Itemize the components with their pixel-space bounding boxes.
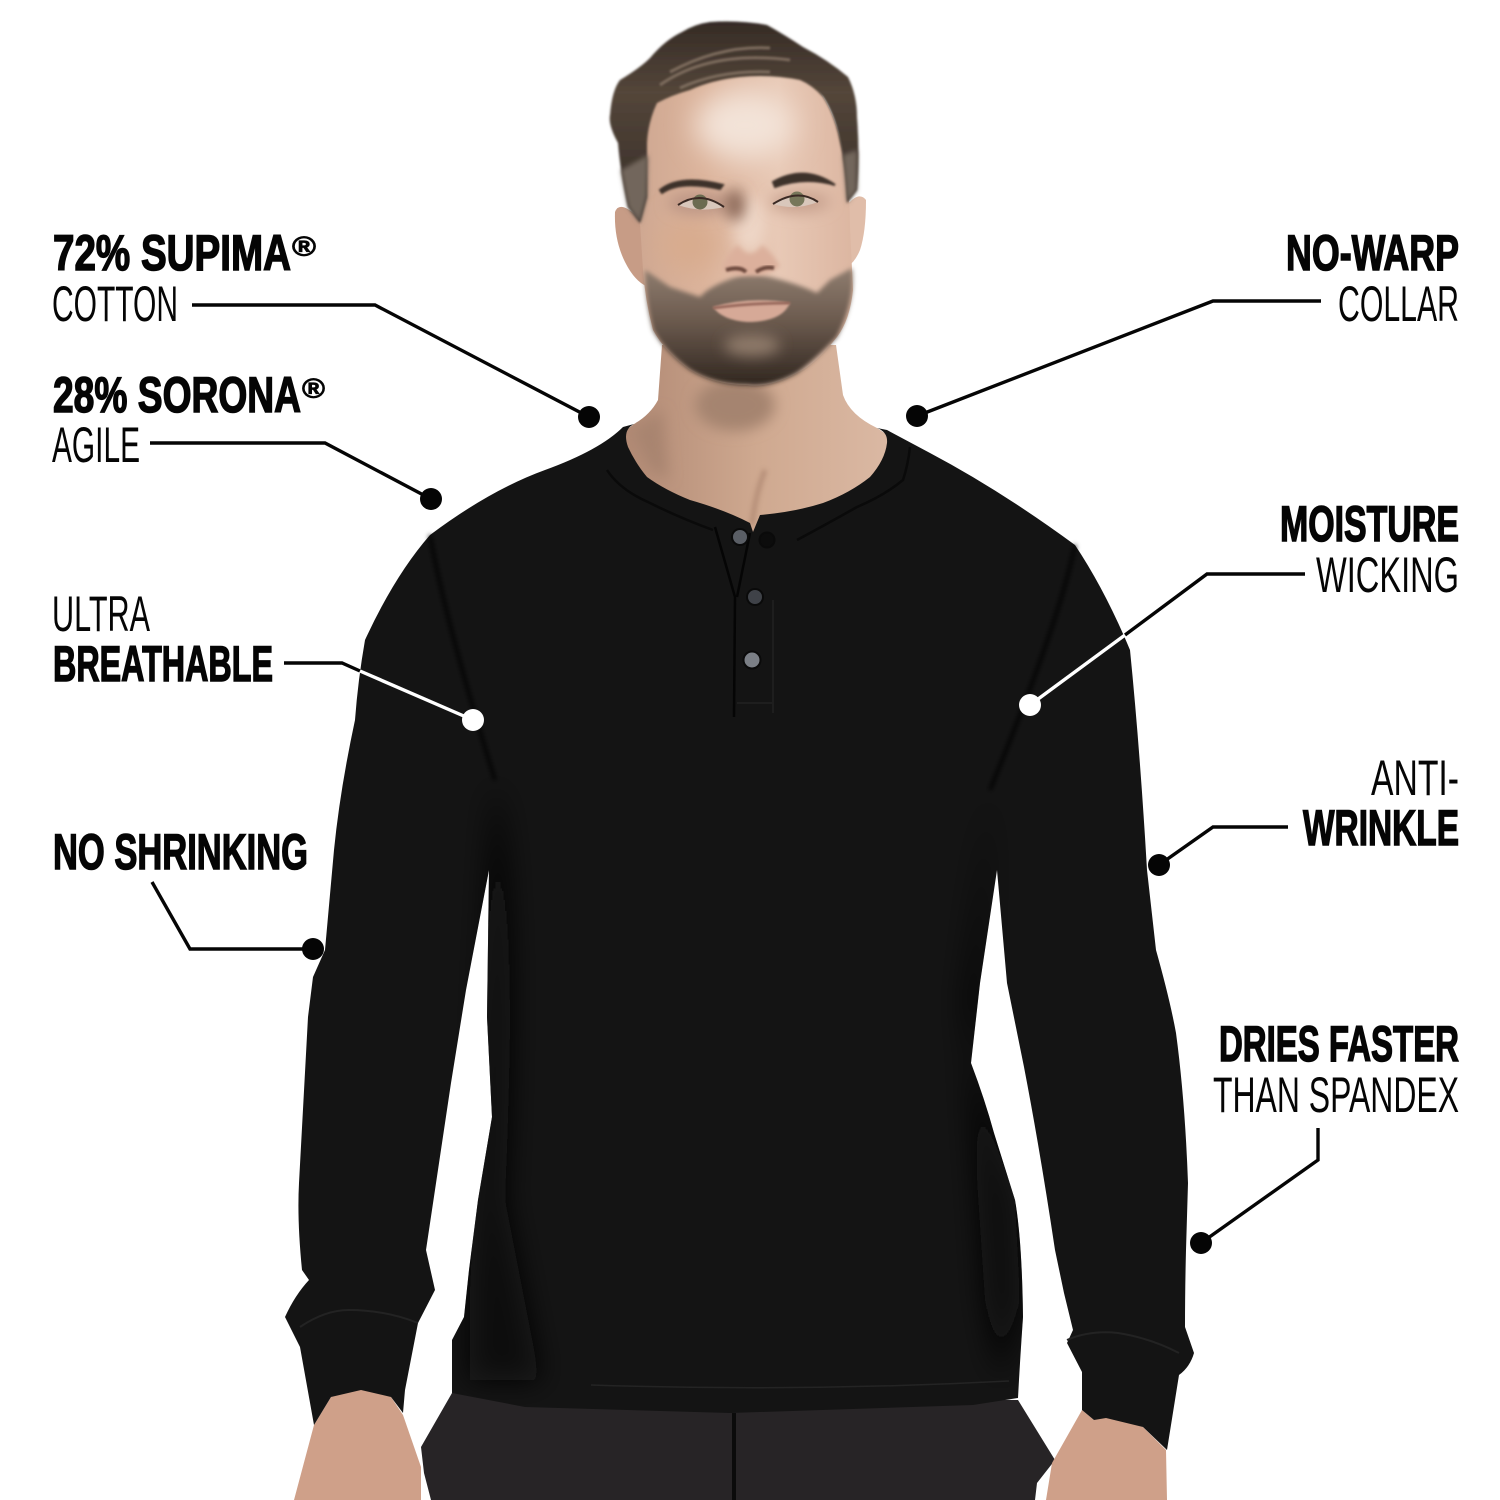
left upper lid xyxy=(678,198,724,207)
right ear xyxy=(845,196,866,266)
eyebrows xyxy=(660,174,835,193)
marker xyxy=(420,488,442,510)
heading: 28% SORONA xyxy=(53,367,301,423)
marker xyxy=(1148,854,1170,876)
shirt shadows xyxy=(470,780,1020,1380)
callout: anti-wrinkle xyxy=(1148,750,1459,876)
leader line on shirt xyxy=(1030,635,1125,705)
shirt xyxy=(285,424,1194,1450)
placket stitching xyxy=(737,600,773,713)
leader line xyxy=(152,882,313,949)
neck xyxy=(620,345,895,540)
callout: no shrinking xyxy=(53,824,324,960)
face shading xyxy=(660,91,830,271)
marker xyxy=(462,709,484,731)
callout: no-warp collar xyxy=(906,225,1459,427)
left ear xyxy=(615,207,648,287)
beard xyxy=(645,268,853,386)
leader line on shirt xyxy=(360,671,473,720)
leader line xyxy=(1125,574,1305,635)
nose xyxy=(722,245,780,276)
hair xyxy=(610,21,858,223)
buttons xyxy=(732,529,774,668)
collar seam xyxy=(607,447,910,540)
nostrils xyxy=(726,268,774,272)
cuff seams xyxy=(300,1310,1179,1353)
chin highlight xyxy=(724,334,780,356)
subheading: COTTON xyxy=(52,276,178,332)
callout: moisture wicking xyxy=(1019,496,1459,716)
heading: NO SHRINKING xyxy=(53,824,308,880)
left iris xyxy=(692,194,708,210)
subheading: ULTRA xyxy=(52,586,150,642)
heading: BREATHABLE xyxy=(53,636,273,692)
mouth xyxy=(713,300,790,322)
right hand xyxy=(1046,1410,1167,1500)
left eye white xyxy=(678,198,724,210)
man wearing henley shirt xyxy=(285,21,1194,1500)
neck shading xyxy=(630,379,775,525)
marker xyxy=(1190,1232,1212,1254)
marker xyxy=(906,405,928,427)
callout: ultra breathable xyxy=(52,586,484,731)
marker xyxy=(302,938,324,960)
hem stitch xyxy=(591,1381,1009,1388)
pants fly xyxy=(732,1413,736,1500)
leader line xyxy=(150,443,431,499)
leader line xyxy=(192,305,589,417)
leader line xyxy=(284,663,360,671)
subheading: ANTI- xyxy=(1371,750,1459,806)
callout: 28% Sorona agile xyxy=(52,367,442,510)
marker xyxy=(578,406,600,428)
face xyxy=(640,70,853,386)
heading: 72% SUPIMA xyxy=(53,225,291,281)
registered mark: ® xyxy=(302,373,325,404)
marker xyxy=(1019,694,1041,716)
right upper lid xyxy=(773,195,818,204)
callout: dries faster than spandex xyxy=(1190,1016,1459,1254)
callout: 72% Supima cotton xyxy=(52,225,600,428)
placket xyxy=(715,527,750,717)
right iris xyxy=(790,192,804,206)
lip line xyxy=(713,303,790,308)
pants xyxy=(421,1393,1055,1500)
right eye white xyxy=(773,195,818,207)
registered mark: ® xyxy=(292,231,316,262)
leader line xyxy=(917,301,1321,416)
hair grey sides xyxy=(621,150,857,223)
hair streaks xyxy=(660,48,790,88)
leader line xyxy=(1159,827,1288,865)
armhole seams xyxy=(430,535,1075,790)
subheading: AGILE xyxy=(52,417,140,473)
left hand xyxy=(294,1388,421,1500)
leader line xyxy=(1201,1128,1318,1243)
